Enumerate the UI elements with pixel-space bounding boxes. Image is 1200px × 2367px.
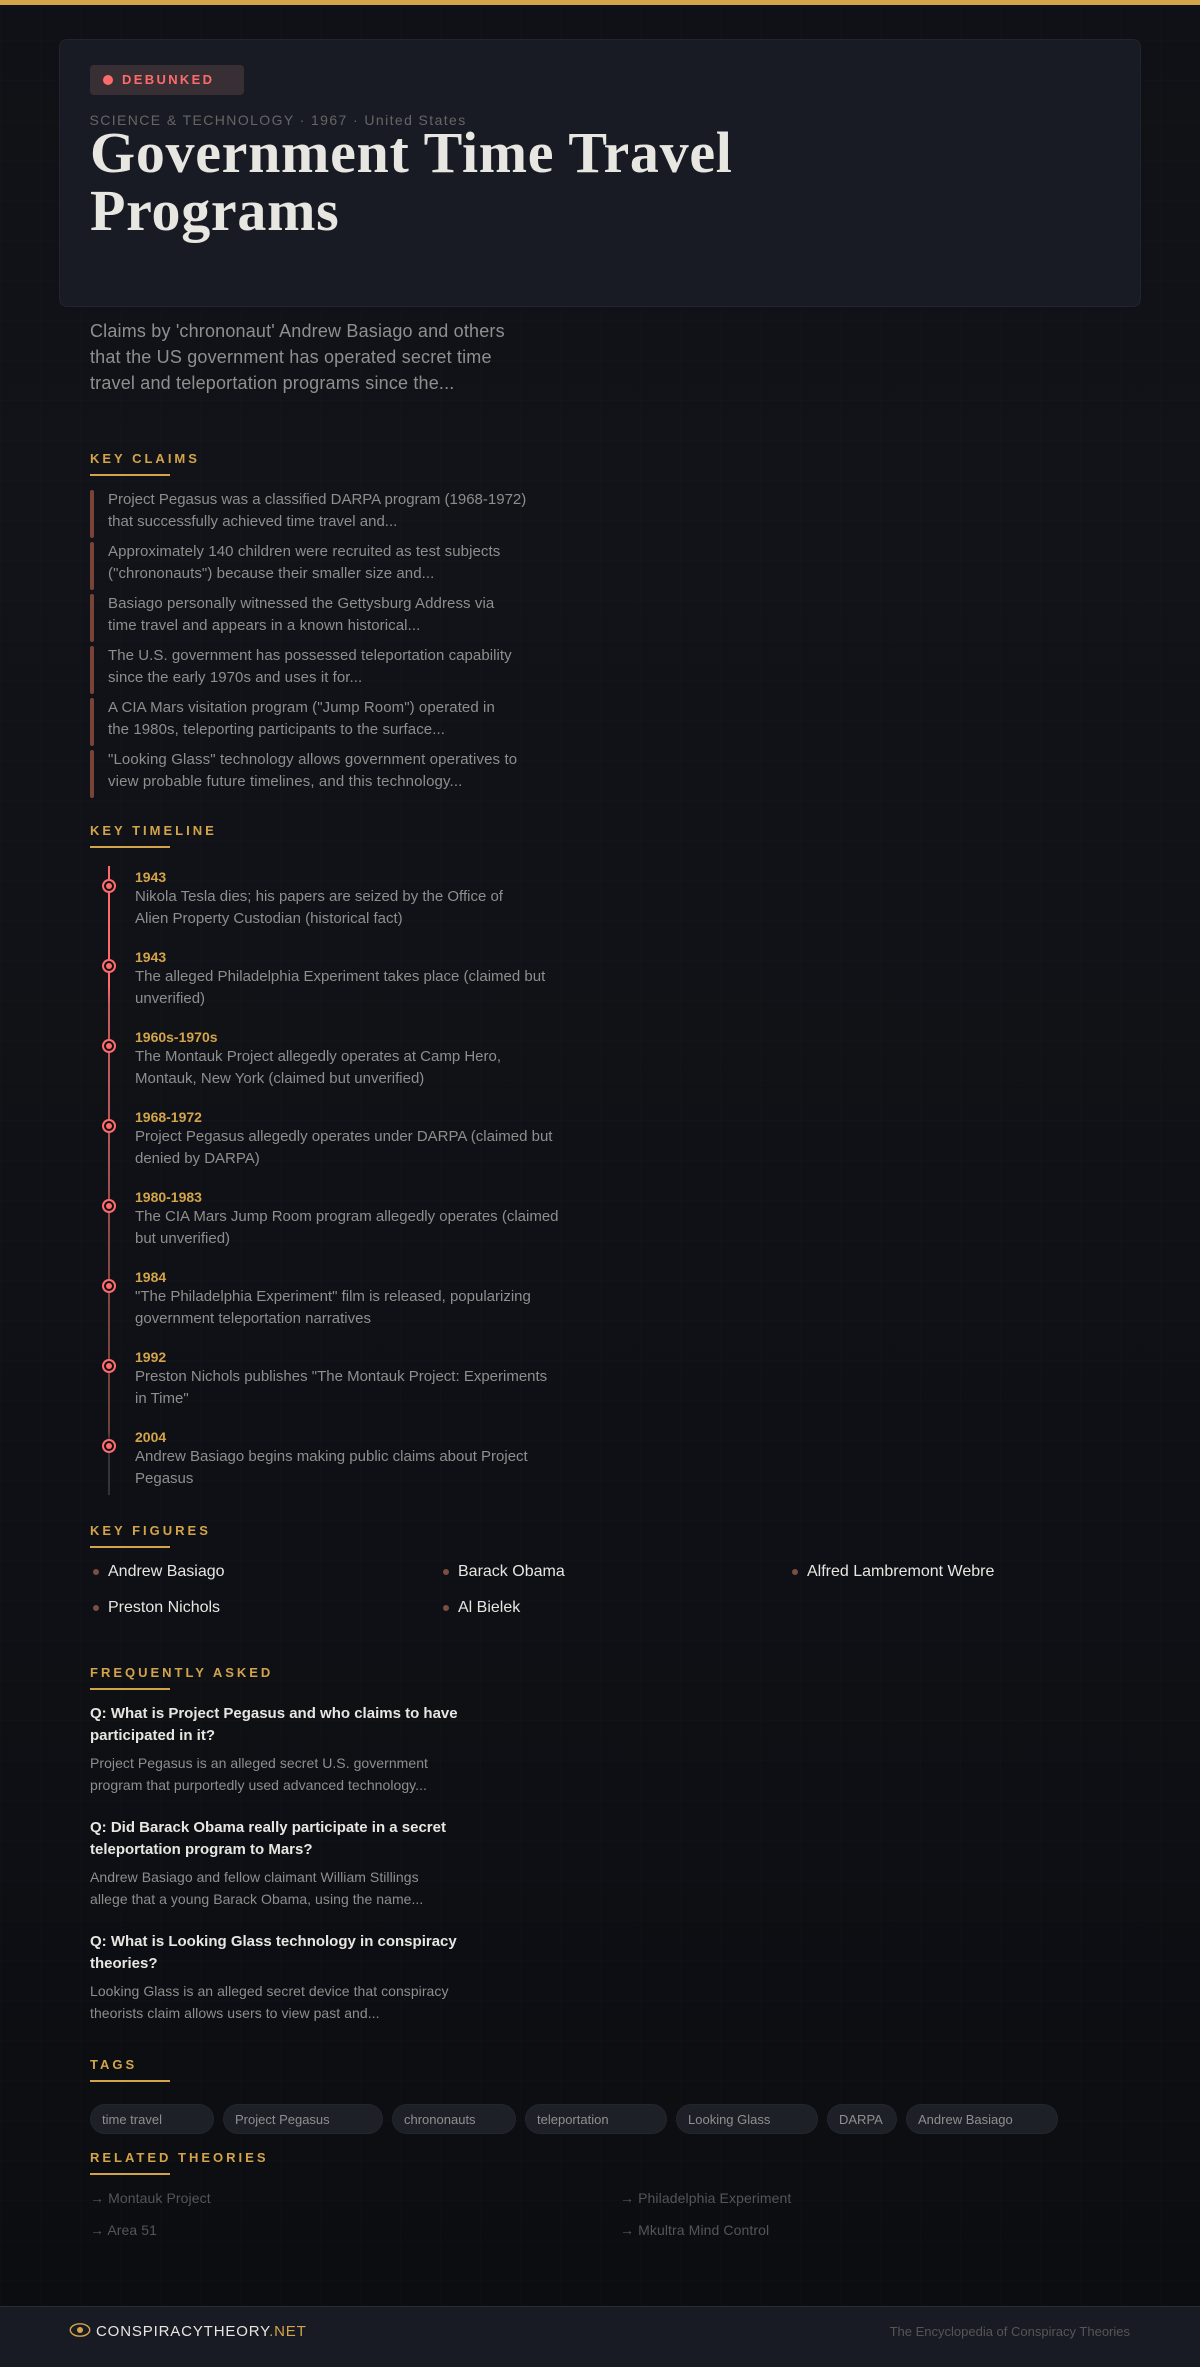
timeline event: film: "The Philadelphia Experiment" film is released, popularizing [135, 1288, 531, 1305]
summary text [90, 321, 505, 393]
heading: key timeline: KEY TIMELINE [90, 823, 217, 838]
faq 3 [90, 1933, 457, 2021]
title: Government Time Travel [90, 120, 733, 185]
faq 1 [90, 1705, 458, 1793]
tag: Looking Glass [676, 2104, 818, 2134]
footer [0, 2306, 1200, 2367]
panel: hero card [59, 39, 1141, 307]
claim 5: the 1980s, teleporting participants to the surface... [108, 721, 445, 738]
timeline event: Nichols: Preston Nichols publishes "The Montauk Project: Experiments [135, 1368, 547, 1385]
related: Montauk Project: → Montauk Project [90, 2190, 211, 2206]
timeline event: Basiago: 2004 [135, 1429, 166, 1445]
tag: teleportation [525, 2104, 667, 2134]
timeline event: film: government teleportation narratives [135, 1310, 371, 1327]
claim 1: that successfully achieved time travel and... [108, 513, 397, 530]
faq 2: Q: Did Barack Obama really participate in a secret [90, 1819, 446, 1836]
claim 6 [90, 750, 517, 798]
timeline event: Montauk: Montauk, New York (claimed but unverified) [135, 1070, 424, 1087]
faq 2: Andrew Basiago and fellow claimant William Stillings [90, 1869, 419, 1885]
tag: DARPA [827, 2104, 897, 2134]
timeline event: film: 1984 [135, 1269, 166, 1285]
faq 1: participated in it? [90, 1727, 215, 1744]
tag: time travel [90, 2104, 214, 2134]
timeline event: Basiago: Andrew Basiago begins making public claims about Project [135, 1448, 528, 1465]
summary text: that the US government has operated secret time [90, 347, 492, 367]
tag: chrononauts [392, 2104, 516, 2134]
tag: Looking Glass: Looking Glass [688, 2112, 770, 2127]
claim 2: ("chrononauts") because their smaller size and... [108, 565, 434, 582]
timeline event: Montauk [102, 1029, 501, 1087]
claim 1: Project Pegasus was a classified DARPA program (1968-1972) [108, 491, 526, 508]
timeline event: 1943 Philadelphia: The alleged Philadelphia Experiment takes place (claimed but [135, 968, 545, 985]
timeline event: 1943 Tesla: 1943 [135, 869, 166, 885]
faq 1: program that purportedly used advanced technology... [90, 1777, 427, 1793]
figure: Al Bielek: Al Bielek [458, 1599, 520, 1616]
claim 6: view probable future timelines, and this technology... [108, 773, 462, 790]
timeline event: 1943 Tesla: Alien Property Custodian (historical fact) [135, 910, 403, 927]
tag: chrononauts: chrononauts [404, 2112, 476, 2127]
timeline event: 1943 Philadelphia [102, 949, 546, 1007]
tag: Project Pegasus: Project Pegasus [235, 2112, 330, 2127]
tag: time travel: time travel [102, 2112, 162, 2127]
tag: teleportation: teleportation [537, 2112, 609, 2127]
timeline event: Nichols: 1992 [135, 1349, 166, 1365]
figure: Barack Obama: Barack Obama [458, 1563, 565, 1580]
timeline event: Basiago [102, 1429, 528, 1487]
timeline event: Pegasus: denied by DARPA) [135, 1150, 260, 1167]
timeline event: Mars: 1980-1983 [135, 1189, 202, 1205]
heading: tags: TAGS [90, 2057, 137, 2072]
icon: eye logo [70, 2323, 90, 2337]
related: Philadelphia Experiment: → Philadelphia Experiment [620, 2190, 791, 2206]
tag: Andrew Basiago: Andrew Basiago [918, 2112, 1013, 2127]
tag: DARPA: DARPA [839, 2112, 883, 2127]
figure: Alfred Lambremont Webre: Alfred Lambremont Webre [807, 1563, 994, 1580]
timeline event: Nichols [102, 1349, 547, 1407]
tag: Andrew Basiago [906, 2104, 1058, 2134]
faq 3: Looking Glass is an alleged secret device that conspiracy [90, 1983, 448, 1999]
timeline event: Pegasus [102, 1109, 552, 1167]
claim 5 [90, 698, 495, 746]
claim 6: "Looking Glass" technology allows government operatives to [108, 751, 517, 768]
claim 2 [90, 542, 500, 590]
timeline event: Mars [102, 1189, 559, 1247]
figure: Preston Nichols: Preston Nichols [108, 1599, 220, 1616]
logo wordmark: CONSPIRACYTHEORY.NET [96, 2323, 307, 2340]
timeline event: Pegasus: Project Pegasus allegedly operates under DARPA (claimed but [135, 1128, 552, 1145]
timeline event: Montauk: The Montauk Project allegedly operates at Camp Hero, [135, 1048, 501, 1065]
title [90, 120, 733, 243]
heading: key claims: KEY CLAIMS [90, 451, 200, 466]
heading: frequently asked: FREQUENTLY ASKED [90, 1665, 273, 1680]
footer tagline: The Encyclopedia of Conspiracy Theories [890, 2324, 1130, 2339]
timeline event: Mars: but unverified) [135, 1230, 230, 1247]
meta line: SCIENCE & TECHNOLOGY · 1967 · United States [90, 112, 467, 128]
timeline event: Nichols: in Time" [135, 1390, 189, 1407]
timeline event: Pegasus: 1968-1972 [135, 1109, 202, 1125]
timeline event: film [102, 1269, 531, 1327]
tag row [90, 2104, 1058, 2134]
heading: key figures: KEY FIGURES [90, 1523, 211, 1538]
faq 2: teleportation program to Mars? [90, 1841, 313, 1858]
timeline event: Mars: The CIA Mars Jump Room program allegedly operates (claimed [135, 1208, 559, 1225]
faq 2 [90, 1819, 446, 1907]
timeline rail [108, 866, 110, 1495]
claim 3 [90, 594, 494, 642]
claim 4: since the early 1970s and uses it for... [108, 669, 362, 686]
faq 3: Q: What is Looking Glass technology in conspiracy [90, 1933, 457, 1950]
timeline event: Montauk: 1960s-1970s [135, 1029, 218, 1045]
claim 4: The U.S. government has possessed teleportation capability [108, 647, 512, 664]
faq 3: theorists claim allows users to view past and... [90, 2005, 380, 2021]
claim 5: A CIA Mars visitation program ("Jump Room") operated in [108, 699, 495, 716]
timeline event: 1943 Tesla: Nikola Tesla dies; his papers are seized by the Office of [135, 888, 503, 905]
claim 2: Approximately 140 children were recruited as test subjects [108, 543, 500, 560]
faq 3: theories? [90, 1955, 158, 1972]
title: Programs [90, 178, 339, 243]
summary text: Claims by 'chrononaut' Andrew Basiago and others [90, 321, 505, 341]
claim 3: Basiago personally witnessed the Gettysburg Address via [108, 595, 494, 612]
timeline event: Basiago: Pegasus [135, 1470, 193, 1487]
heading: related theories: RELATED THEORIES [90, 2150, 268, 2165]
summary text: travel and teleportation programs since the... [90, 373, 454, 393]
faq 2: allege that a young Barack Obama, using the name... [90, 1891, 423, 1907]
claim 3: time travel and appears in a known historical... [108, 617, 420, 634]
tag: Project Pegasus [223, 2104, 383, 2134]
timeline event: 1943 Philadelphia: unverified) [135, 990, 205, 1007]
claim 4 [90, 646, 512, 694]
claim 1 [90, 490, 526, 538]
timeline event: 1943 Philadelphia: 1943 [135, 949, 166, 965]
badge: debunked status: DEBUNKED [122, 72, 214, 87]
faq 1: Q: What is Project Pegasus and who claims to have [90, 1705, 458, 1722]
faq 1: Project Pegasus is an alleged secret U.S. government [90, 1755, 428, 1771]
timeline event: 1943 Tesla [102, 869, 503, 927]
top accent bar [0, 0, 1200, 5]
related: Area 51: → Area 51 [90, 2222, 157, 2238]
related: Mkultra Mind Control: → Mkultra Mind Control [620, 2222, 769, 2238]
figure: Andrew Basiago: Andrew Basiago [108, 1563, 225, 1580]
badge: debunked status [90, 65, 244, 95]
